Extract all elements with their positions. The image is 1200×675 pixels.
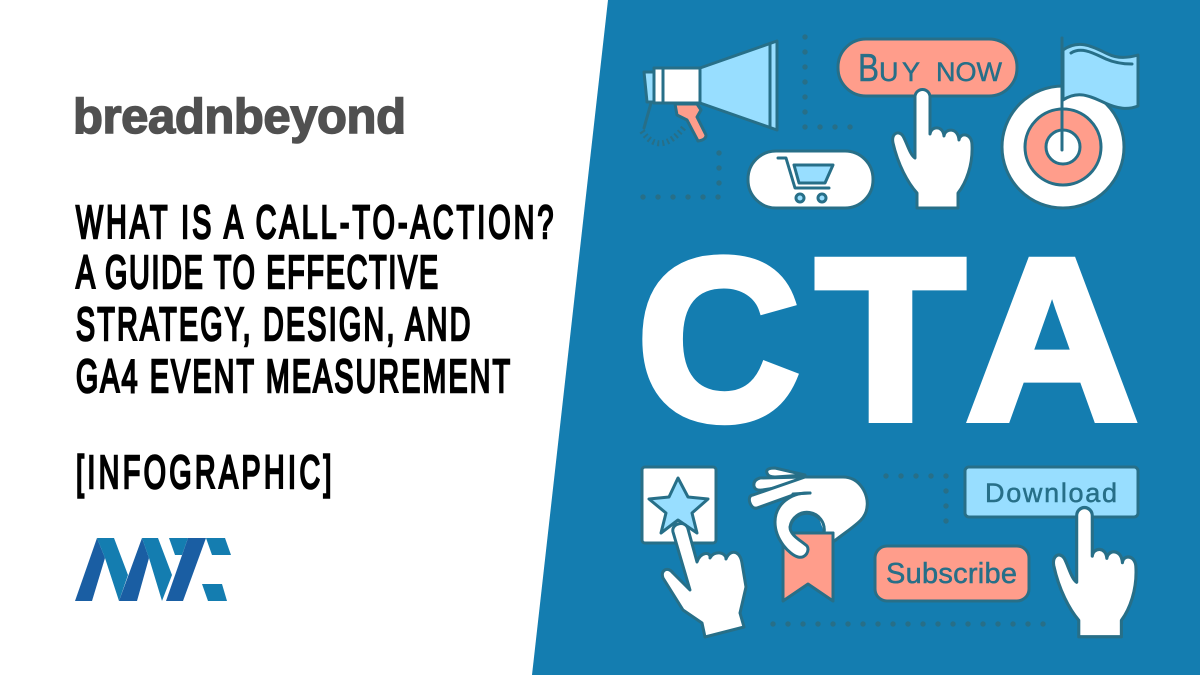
dotted connectors bottom: [770, 473, 1046, 627]
title: STRATEGY, DESIGN, AND: [76, 299, 470, 351]
button: subscribe: [875, 546, 1029, 601]
button: cart pill: [748, 151, 873, 208]
logo: MTC mark: [75, 538, 231, 601]
button: buy now: B: [858, 47, 879, 90]
button: buy now: UY: [879, 57, 920, 87]
button: buy now: NOW: [936, 57, 1003, 87]
dotted connectors top: [640, 34, 853, 200]
icon: hand holding bookmark: [749, 468, 867, 601]
icon: pointing hand on buy now: [893, 90, 972, 208]
CTA big letters: T: [816, 211, 965, 468]
icon: target with flag: [1002, 38, 1138, 208]
CTA big letters: A: [966, 211, 1138, 468]
logo: breadnbeyond: breadnbeyond: [73, 90, 406, 144]
icon: shopping cart: [778, 158, 833, 202]
button: download: [965, 467, 1138, 517]
background panel: blue slanted: [532, 0, 1200, 675]
title: WHAT IS A CALL-TO-ACTION?: [76, 197, 553, 249]
title: A GUIDE TO EFFECTIVE: [76, 247, 438, 299]
button: buy now: [838, 39, 1017, 96]
icon: pointing hand on star: [662, 524, 746, 637]
CTA big letters: C: [637, 211, 800, 468]
subtitle tag: [INFOGRAPHIC]: [76, 447, 331, 499]
icon: pointing hand on download: [1053, 508, 1136, 637]
title: GA4 EVENT MEASUREMENT: [76, 351, 510, 403]
title: [76, 197, 553, 403]
button: subscribe: Subscribe: [886, 558, 1017, 590]
icon: megaphone: [642, 41, 777, 143]
button: download: Download: [985, 478, 1117, 508]
icon: star square: [642, 467, 716, 543]
CTA big letters: [637, 211, 1138, 468]
